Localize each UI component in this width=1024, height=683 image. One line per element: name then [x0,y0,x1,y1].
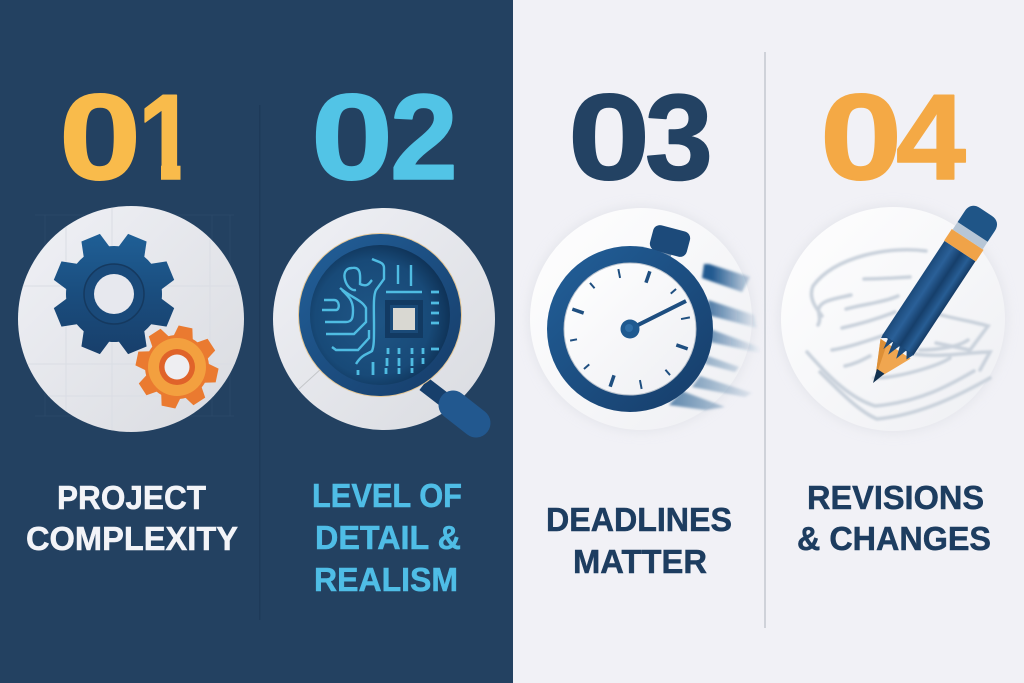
heading: revisions and changes [797,479,991,557]
heading: level of detail and realism: DETAIL & [315,519,461,556]
speed streaks [669,264,760,410]
background: dark panel [0,0,513,683]
icon: magnifier over circuit [273,208,495,430]
icon: gears on circle [18,206,244,432]
number 03: 3 [645,69,713,205]
heading: level of detail and realism: LEVEL OF [312,477,462,514]
number 02: 0 [311,68,393,205]
number 01: 0 [59,68,141,205]
heading: project complexity: COMPLEXITY [26,520,238,557]
background: light panel [512,0,1024,683]
heading: project complexity [26,479,238,557]
number 04: 4 [896,70,966,206]
heading: deadlines matter: MATTER [573,543,707,580]
heading: revisions and changes: & CHANGES [797,520,991,557]
number 02 [311,68,458,205]
paper strokes [807,250,990,419]
heading: project complexity: PROJECT [57,479,206,516]
panel: 04 revisions [780,68,1006,557]
number 04 [820,68,966,206]
number 03: 0 [568,68,650,205]
heading: revisions and changes: REVISIONS [807,479,984,516]
number 04: 0 [820,68,902,205]
icon: pencil and paper [780,201,1006,432]
number 01: 1 [138,69,196,205]
stopwatch crown [648,224,692,259]
chip [385,300,423,338]
dial ticks [570,269,690,389]
panel: 01 project complexity [18,68,244,557]
magnifier handle [424,384,476,423]
heading: level of detail and realism [312,477,462,598]
orange gear [135,325,219,409]
number 02: 2 [390,69,458,205]
panel: 02 level of detail [273,68,495,598]
heading: level of detail and realism: REALISM [314,561,458,598]
blue gear [54,234,174,354]
stopwatch hand [620,301,686,338]
number 01 [59,68,202,205]
icon: stopwatch [529,207,760,431]
heading: deadlines matter: DEADLINES [546,501,732,538]
circuit traces [322,259,422,364]
number 03 [568,68,713,205]
pencil [857,201,1002,393]
panel: 03 deadlines [529,68,760,580]
heading: deadlines matter [546,501,732,580]
